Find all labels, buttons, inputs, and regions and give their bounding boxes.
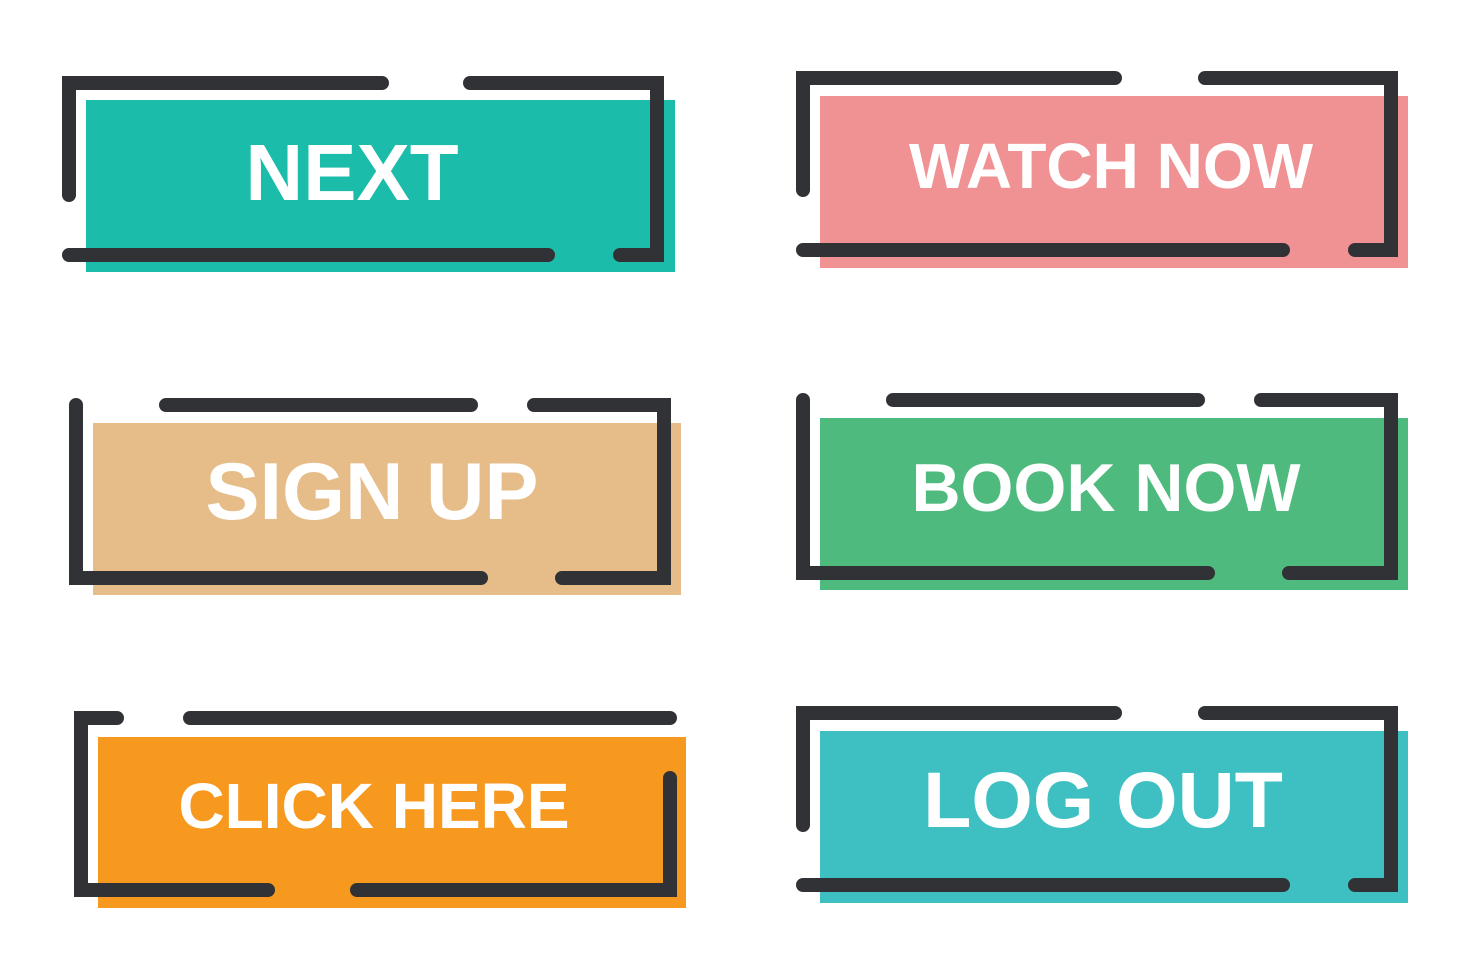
label: BOOK NOW: BOOK NOW (911, 450, 1301, 526)
button: LOG OUT (803, 713, 1408, 903)
label: SIGN UP: SIGN UP (205, 447, 539, 537)
button: BOOK NOW (803, 400, 1408, 590)
label: NEXT: NEXT (245, 128, 459, 217)
button: NEXT (69, 83, 675, 272)
label: LOG OUT: LOG OUT (923, 755, 1283, 844)
button: CLICK HERE (81, 718, 686, 908)
button: WATCH NOW (803, 78, 1408, 268)
button: SIGN UP (76, 405, 681, 595)
label: CLICK HERE: CLICK HERE (178, 770, 570, 842)
label: WATCH NOW: WATCH NOW (909, 130, 1314, 202)
